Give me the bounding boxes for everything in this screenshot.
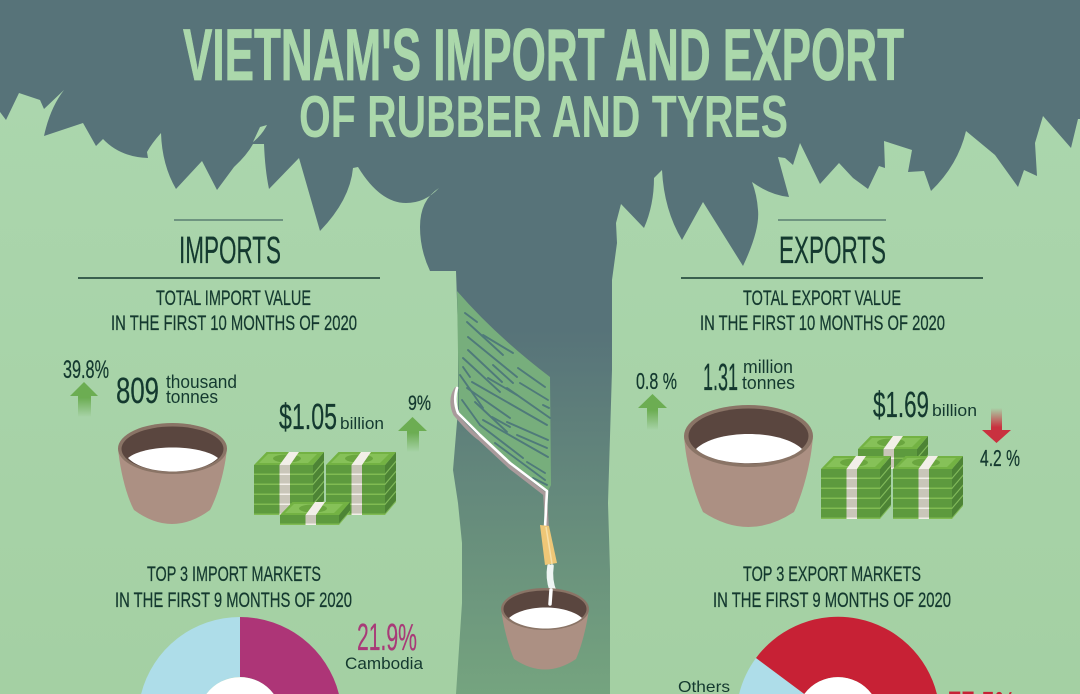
export volume change: 0.8 %: [636, 368, 677, 394]
label: Cambodia: Cambodia: [345, 654, 424, 673]
top 3 import markets heading: TOP 3 IMPORT MARKETS: [147, 563, 321, 586]
total export value text: [700, 287, 945, 335]
latex drip: [548, 566, 555, 592]
label: Cambodia: 21.9%: [357, 617, 417, 659]
spout: [540, 525, 557, 565]
import volume: tonnes: [166, 387, 218, 407]
total import value text: IN THE FIRST 10 MONTHS OF 2020: [111, 312, 357, 335]
icon: money stacks: [254, 452, 396, 525]
export value change: 4.2 %: [980, 445, 1020, 471]
icon: latex bucket large: [684, 405, 813, 527]
total export value text: TOTAL EXPORT VALUE: [743, 287, 901, 310]
icon: bucket under spout: [501, 588, 589, 670]
right foliage background: [608, 116, 1080, 694]
imports heading: IMPORTS: [179, 230, 281, 272]
collection groove: [452, 388, 547, 527]
title: [183, 15, 904, 150]
import value change: 9%: [408, 392, 431, 415]
import volume: thousand: [166, 372, 237, 392]
top 3 export markets heading: TOP 3 EXPORT MARKETS: [743, 563, 921, 586]
export volume change: [636, 368, 677, 430]
donut chart: exports: [739, 617, 937, 694]
import volume change: [63, 356, 109, 417]
panel: exports: [636, 220, 1020, 694]
export value: billion: [932, 401, 977, 420]
top 3 export markets heading: [713, 563, 951, 612]
export volume: tonnes: [742, 373, 795, 393]
tapped bark: [457, 291, 551, 491]
icon: latex bucket: [118, 423, 227, 524]
import volume: 809: [116, 370, 159, 411]
top 3 import markets heading: IN THE FIRST 9 MONTHS OF 2020: [115, 589, 352, 612]
illustration: rubber tapping: [452, 291, 589, 670]
exports heading: EXPORTS: [779, 230, 886, 272]
import value change: [398, 392, 431, 452]
top 3 import markets heading: [115, 563, 352, 612]
export value: $1.69: [873, 384, 929, 425]
import value: billion: [340, 414, 384, 433]
export volume: million: [743, 357, 793, 377]
icon: money stacks: [821, 436, 963, 519]
tree trunk: [440, 300, 630, 694]
export volume: 1.31: [703, 357, 738, 399]
total export value text: IN THE FIRST 10 MONTHS OF 2020: [700, 312, 945, 335]
latex drop into bucket: [550, 590, 551, 604]
top 3 export markets heading: IN THE FIRST 9 MONTHS OF 2020: [713, 589, 951, 612]
export value change: [980, 408, 1020, 471]
total import value text: [111, 287, 357, 335]
left foliage background: [0, 90, 462, 694]
import volume: [116, 370, 237, 411]
import value: $1.05: [279, 396, 337, 437]
total import value text: TOTAL IMPORT VALUE: [156, 287, 311, 310]
title: OF RUBBER AND TYRES: [299, 84, 788, 150]
label: Cambodia: [345, 617, 424, 673]
import volume change: 39.8%: [63, 356, 109, 384]
donut chart: imports: [141, 617, 339, 694]
panel: imports: [63, 220, 431, 694]
